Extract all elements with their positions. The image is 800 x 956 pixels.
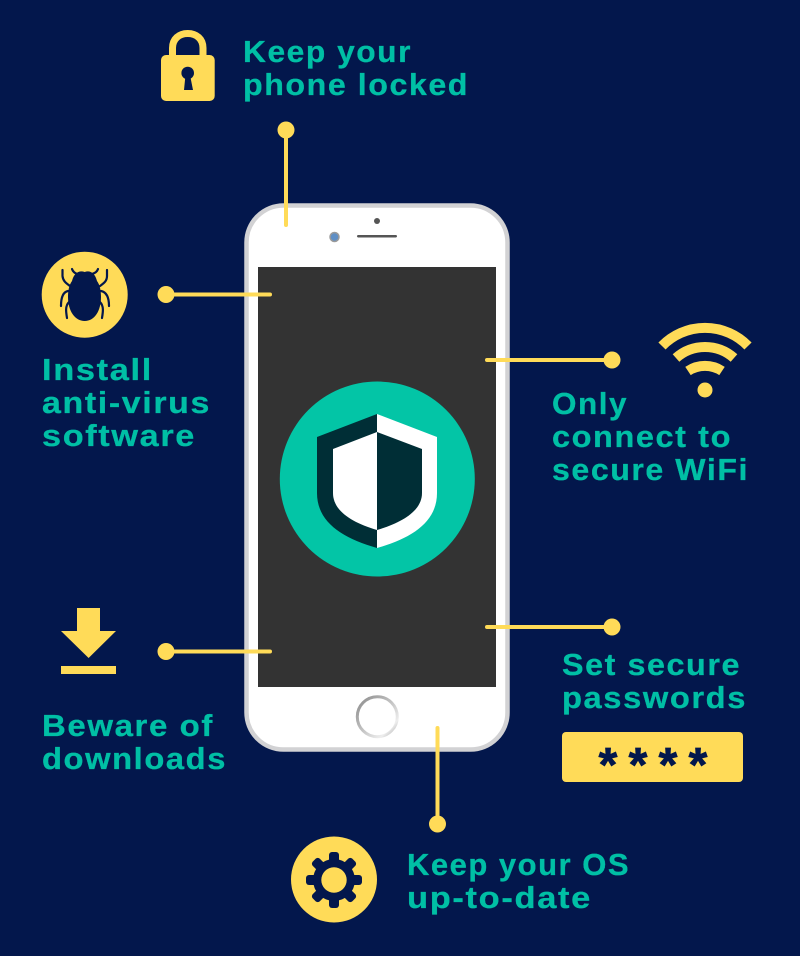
bug legs bbox=[61, 269, 109, 318]
text: install anti-virus: anti-virus bbox=[42, 385, 211, 420]
text: secure WiFi bbox=[552, 386, 749, 487]
text: secure WiFi: secure WiFi bbox=[552, 452, 749, 487]
text: keep OS up-to-date bbox=[407, 847, 630, 915]
icon: download bbox=[61, 608, 116, 674]
text: install anti-virus: Install bbox=[42, 352, 153, 387]
connector: anti-virus bbox=[158, 286, 270, 303]
connector: downloads bbox=[158, 643, 270, 660]
password field: * bbox=[659, 739, 678, 792]
text: install anti-virus: software bbox=[42, 418, 196, 453]
icon: WiFi bbox=[662, 328, 748, 398]
connector: passwords bbox=[487, 618, 620, 636]
password field bbox=[562, 732, 743, 792]
icon: bug bbox=[42, 252, 128, 338]
home button bbox=[357, 697, 397, 737]
icon: gear bbox=[291, 836, 377, 922]
text: keep OS up-to-date: up-to-date bbox=[407, 880, 592, 915]
text: set passwords: Set secure bbox=[562, 647, 741, 682]
text: keep OS up-to-date: Keep your OS bbox=[407, 847, 630, 882]
icon: padlock bbox=[161, 34, 215, 101]
password field: * bbox=[629, 739, 648, 792]
front sensor bbox=[374, 218, 380, 224]
text: set passwords: passwords bbox=[562, 680, 747, 715]
connector: WiFi bbox=[487, 352, 620, 368]
phone screen bbox=[258, 267, 496, 687]
shield badge bbox=[280, 382, 475, 576]
connector: lock bbox=[278, 122, 294, 225]
text: secure WiFi: Only bbox=[552, 386, 628, 421]
speaker bbox=[357, 235, 397, 238]
text: keep phone locked: phone locked bbox=[243, 67, 469, 102]
shield bbox=[317, 414, 437, 548]
password field: * bbox=[689, 739, 708, 792]
connector: OS update bbox=[429, 728, 446, 832]
camera bbox=[330, 232, 339, 242]
text: secure WiFi: connect to bbox=[552, 419, 732, 454]
text: keep phone locked: Keep your bbox=[243, 34, 412, 69]
text: beware of downloads bbox=[42, 708, 227, 776]
text: set passwords bbox=[562, 647, 747, 715]
password field: * bbox=[599, 739, 618, 792]
text: beware of downloads: Beware of bbox=[42, 708, 214, 743]
text: install anti-virus bbox=[42, 352, 211, 453]
bug body bbox=[68, 271, 101, 321]
text: beware of downloads: downloads bbox=[42, 741, 227, 776]
text: keep phone locked bbox=[243, 34, 469, 102]
phone bbox=[246, 206, 508, 750]
